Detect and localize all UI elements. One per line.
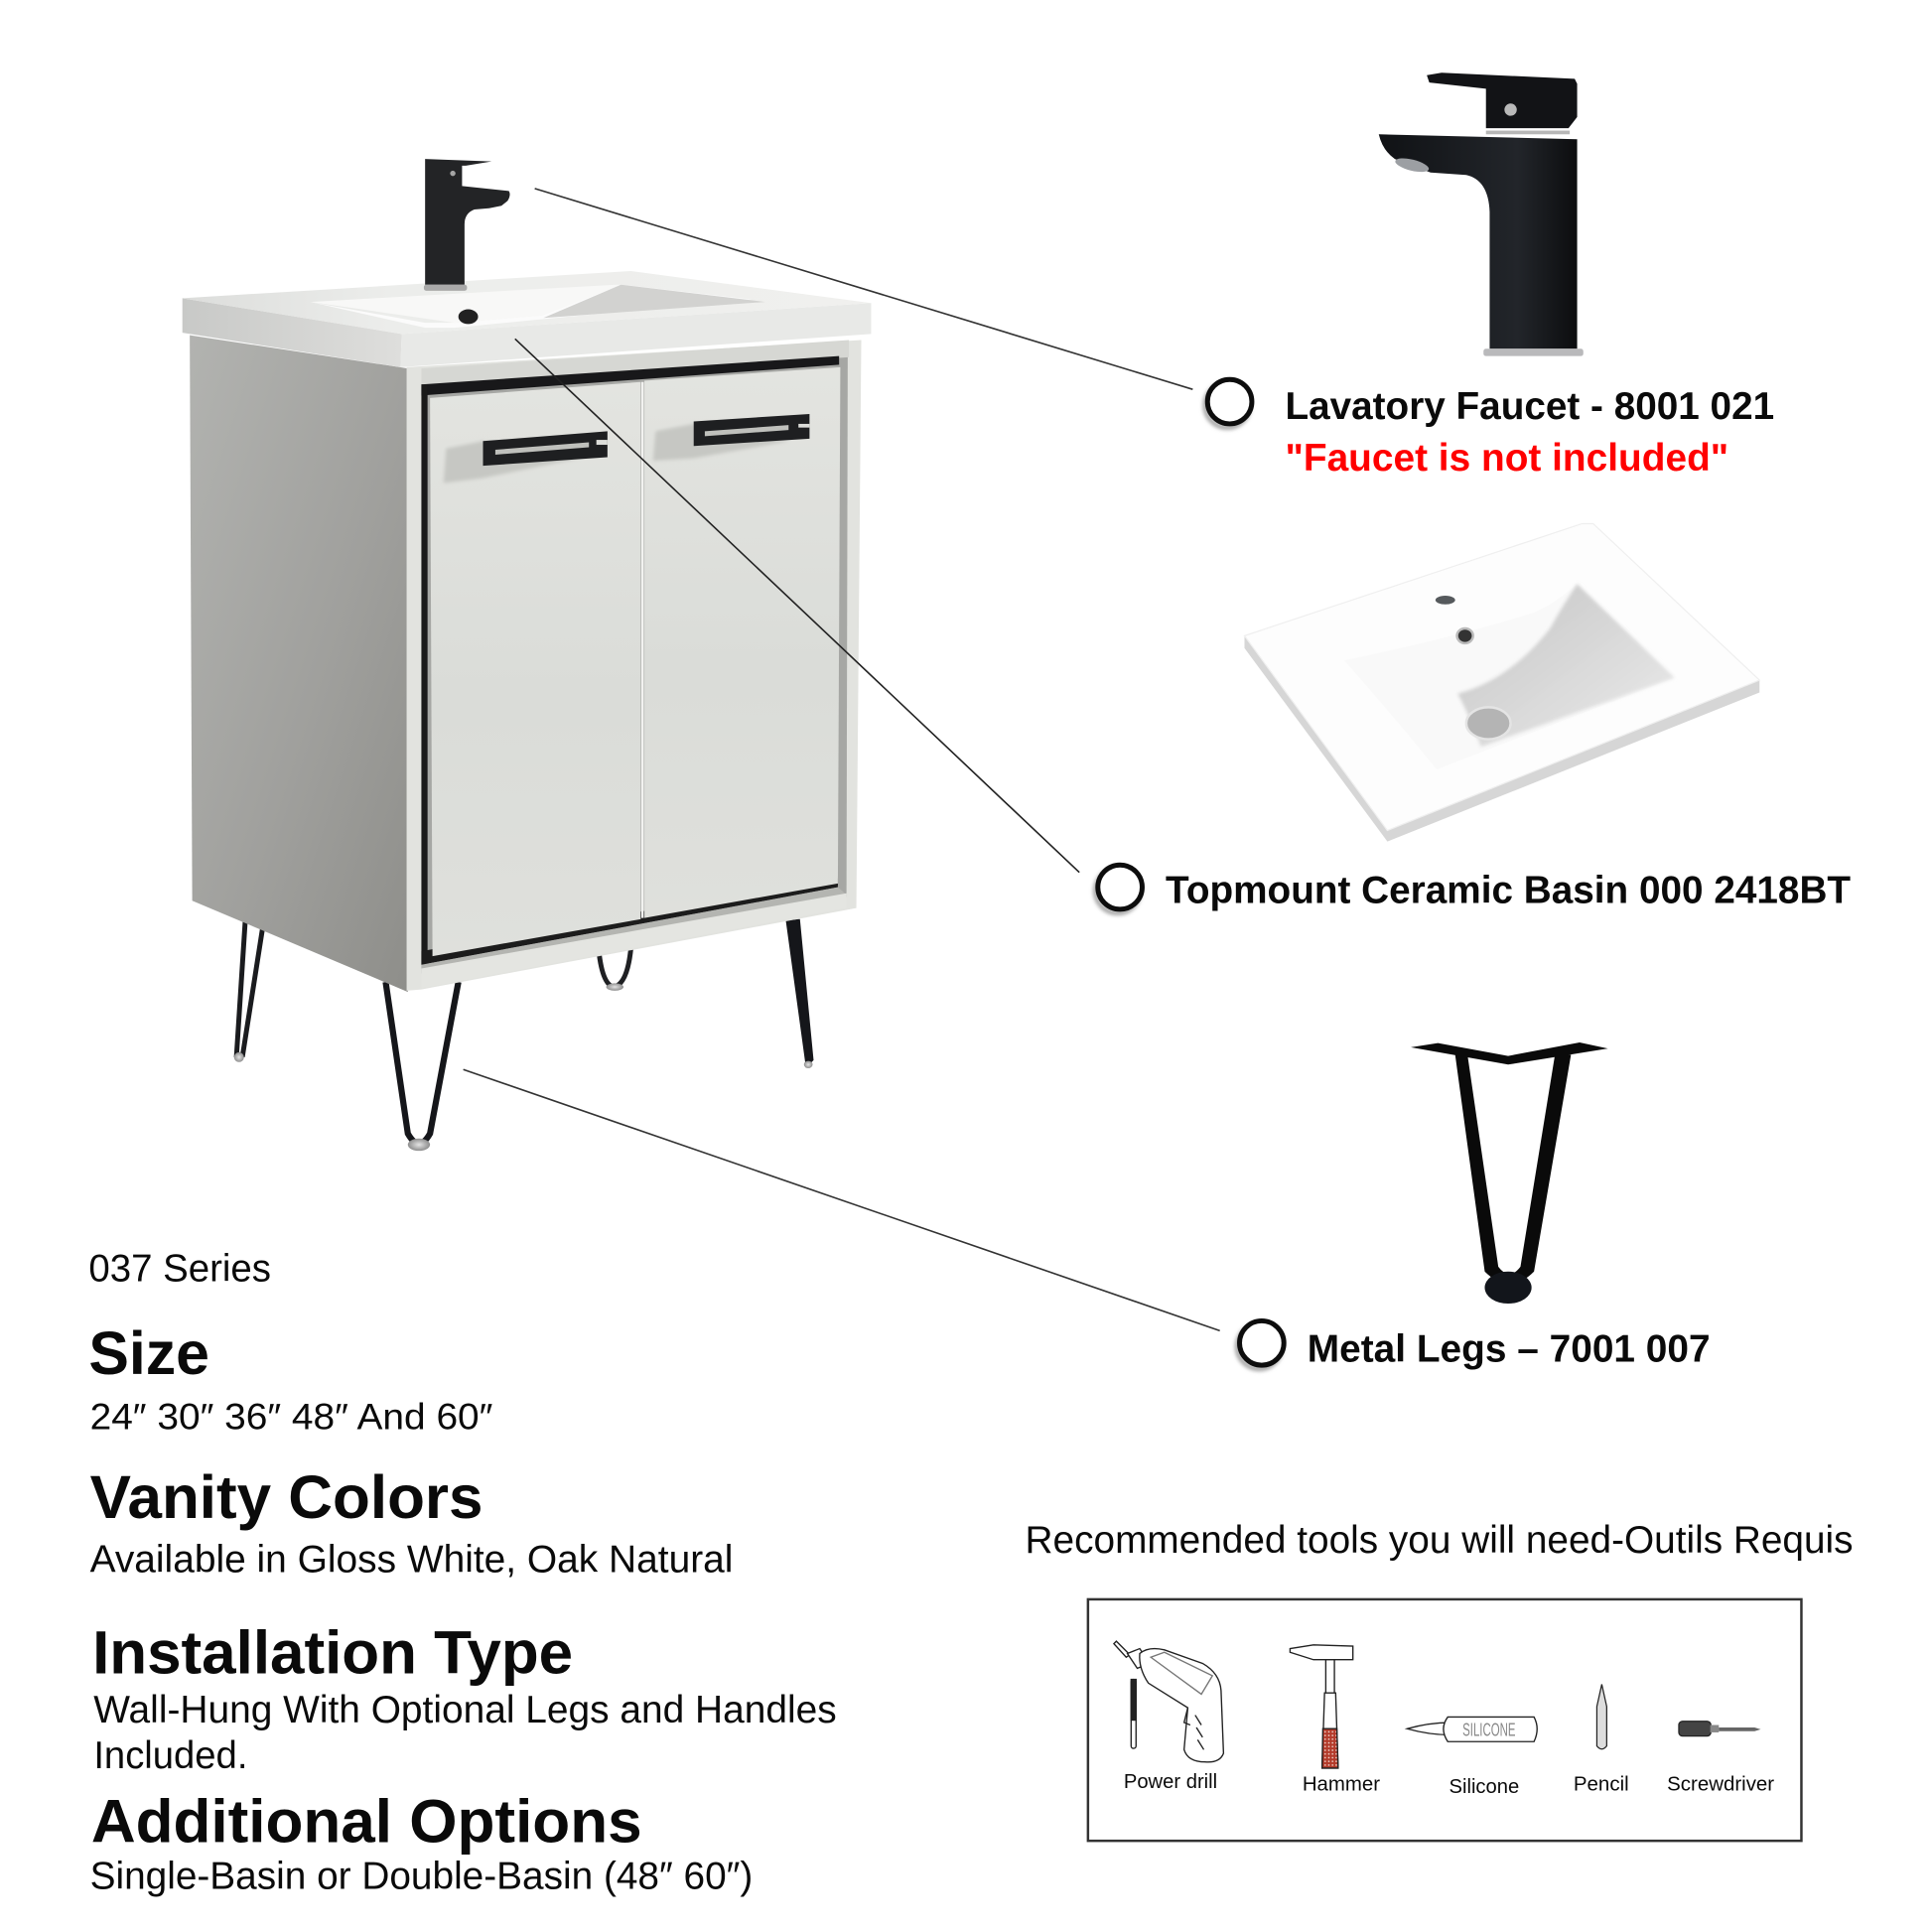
door recess	[421, 357, 848, 973]
label: silicone: Silicone	[1449, 1775, 1519, 1798]
size values: 24″ 30″ 36″ 48″ And 60″	[90, 1396, 492, 1438]
vanity cabinet illustration	[183, 159, 871, 1151]
tools heading: Recommended tools you will need-Outils Requis	[1026, 1519, 1854, 1562]
bowl floor shading	[1457, 584, 1675, 747]
right leg	[787, 919, 812, 1068]
icon: pencil	[1596, 1685, 1606, 1749]
faucet aerator	[1394, 156, 1430, 175]
faucet collar	[1486, 131, 1570, 134]
large metal leg photo	[1411, 1042, 1608, 1304]
callout note: faucet not included: "Faucet is not included"	[1285, 437, 1728, 480]
faucet handle	[1427, 72, 1578, 128]
basin bowl	[1344, 584, 1675, 769]
large faucet photo	[1379, 72, 1584, 356]
callout label: lavatory faucet: Lavatory Faucet - 8001 021	[1285, 385, 1774, 428]
right door	[644, 367, 840, 918]
small faucet	[424, 159, 510, 291]
colors text: Available in Gloss White, Oak Natural	[90, 1539, 733, 1582]
tools panel	[1088, 1599, 1801, 1841]
faucet base plate	[1483, 348, 1584, 356]
right door handle	[694, 414, 809, 446]
heading: additional options: Additional Options	[91, 1787, 642, 1855]
label: pencil: Pencil	[1574, 1772, 1629, 1795]
icon: power drill	[1114, 1641, 1223, 1762]
label: hammer: Hammer	[1303, 1772, 1380, 1795]
options text: Single-Basin or Double-Basin (48″ 60″)	[90, 1856, 753, 1898]
label: screwdriver: Screwdriver	[1667, 1772, 1774, 1795]
faucet body	[1379, 134, 1578, 348]
heading: size: Size	[88, 1319, 209, 1387]
basin top	[1244, 523, 1759, 830]
front left hairpin leg	[385, 982, 459, 1151]
callout marker: basin	[1095, 865, 1142, 913]
overflow	[1457, 628, 1473, 643]
back centre hairpin leg	[599, 949, 630, 991]
faucet logo	[1504, 103, 1517, 116]
icon: silicone tube	[1407, 1717, 1537, 1741]
callout marker: faucet	[1205, 379, 1252, 428]
cabinet front frame	[407, 341, 862, 991]
handle shadows	[444, 424, 788, 483]
icon: silicone tube: SILICONE	[1462, 1720, 1516, 1740]
leader line: basin	[515, 339, 1079, 873]
heading: vanity colors: Vanity Colors	[90, 1463, 483, 1531]
icon: hammer	[1290, 1645, 1353, 1768]
installation text: Wall-Hung With Optional Legs and Handles	[93, 1689, 837, 1731]
callout marker: legs	[1237, 1320, 1284, 1369]
cabinet side panel	[190, 336, 408, 992]
basin edge	[1244, 635, 1759, 842]
installation text: Included.	[93, 1734, 247, 1777]
large basin photo	[1244, 523, 1759, 842]
ceramic countertop	[183, 271, 871, 367]
tap hole	[1436, 596, 1455, 605]
mounting plate	[1411, 1042, 1608, 1064]
callout label: basin: Topmount Ceramic Basin 000 2418BT	[1166, 870, 1852, 912]
label: power drill: Power drill	[1124, 1770, 1217, 1793]
heading: installation type: Installation Type	[92, 1618, 573, 1686]
rubber foot	[1484, 1272, 1532, 1304]
series label: 037 Series	[88, 1248, 271, 1291]
icon: screwdriver	[1679, 1722, 1760, 1736]
drain	[1466, 707, 1511, 740]
rear left hairpin leg	[234, 921, 262, 1062]
leader line: faucet	[535, 189, 1192, 389]
left door handle	[483, 431, 608, 466]
installation text	[93, 1689, 837, 1777]
hairpin rods	[1455, 1054, 1571, 1284]
leader line: legs	[464, 1069, 1220, 1330]
left door	[430, 382, 640, 956]
callout label: metal legs: Metal Legs – 7001 007	[1308, 1327, 1711, 1370]
